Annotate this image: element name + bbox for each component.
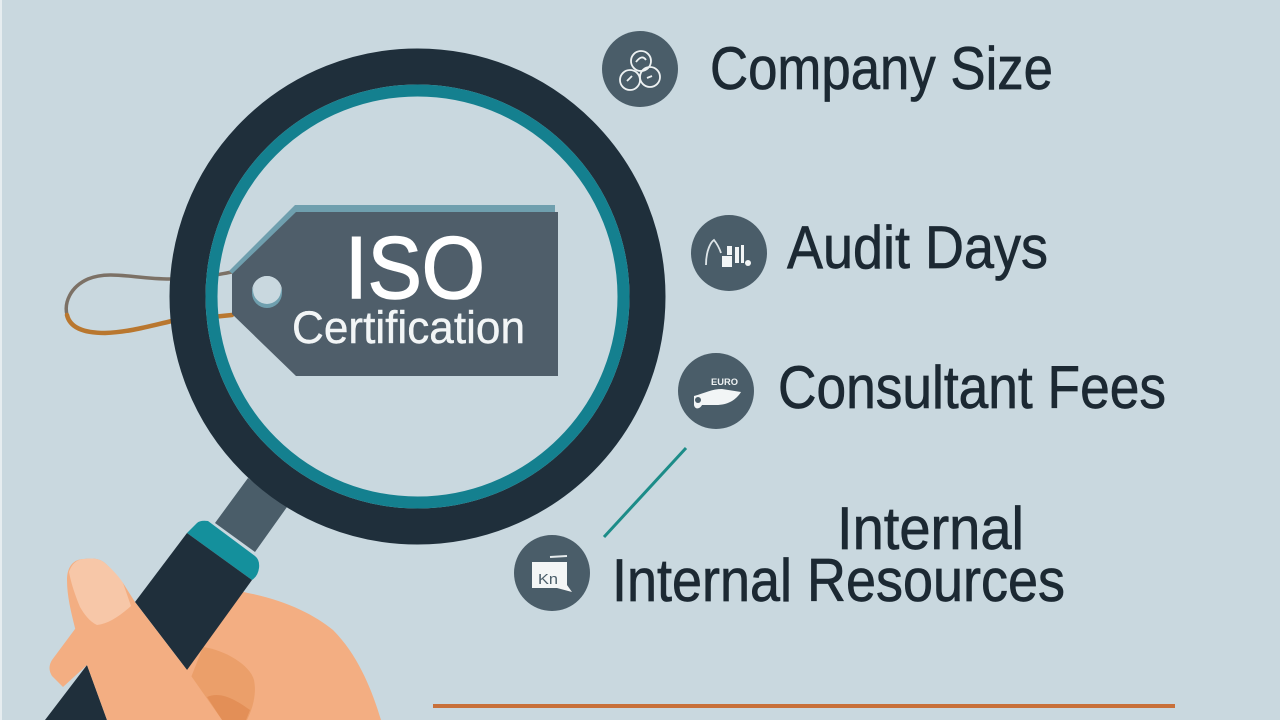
tag body (232, 212, 558, 376)
item: internal resources (514, 495, 1065, 614)
palm shadow (190, 647, 255, 720)
handle teal collar (187, 521, 259, 580)
label second line: Internal Resources (612, 547, 1065, 614)
handle dark grip (135, 533, 252, 670)
label: Consultant Fees (778, 354, 1166, 421)
thumb (67, 559, 222, 720)
item: consultant fees (678, 353, 1166, 429)
palm (150, 590, 381, 720)
tag subheading: Certification (292, 302, 525, 353)
item: company size (602, 31, 1053, 107)
magnifying glass (188, 66, 648, 552)
icon: speech note (514, 535, 590, 611)
icon: audit bars (691, 215, 767, 291)
back finger (50, 625, 100, 687)
teal connector line (604, 448, 686, 537)
magnifier neck (215, 478, 287, 552)
icon: hand with money (678, 353, 754, 429)
icon: speech note: Kn (538, 571, 558, 588)
tag eyelet (252, 276, 282, 308)
icon: three circles (602, 31, 678, 107)
item: audit days (691, 214, 1048, 291)
label: Audit Days (787, 214, 1048, 281)
label: Company Size (710, 35, 1053, 102)
thumbnail (69, 559, 131, 625)
tag heading: ISO (345, 218, 485, 317)
magnifier teal ring (212, 90, 624, 502)
tag top edge (229, 205, 555, 275)
hand holding handle (45, 521, 381, 720)
tag string loop (66, 272, 232, 333)
icon: hand with money: EURO (711, 377, 738, 387)
label first line: Internal (837, 495, 1024, 562)
magnifier outer ring (188, 66, 648, 526)
orange baseline rule (433, 704, 1175, 708)
handle lower grip (45, 665, 107, 720)
ISO Certification tag (229, 205, 558, 376)
palm deep shadow (207, 695, 250, 720)
